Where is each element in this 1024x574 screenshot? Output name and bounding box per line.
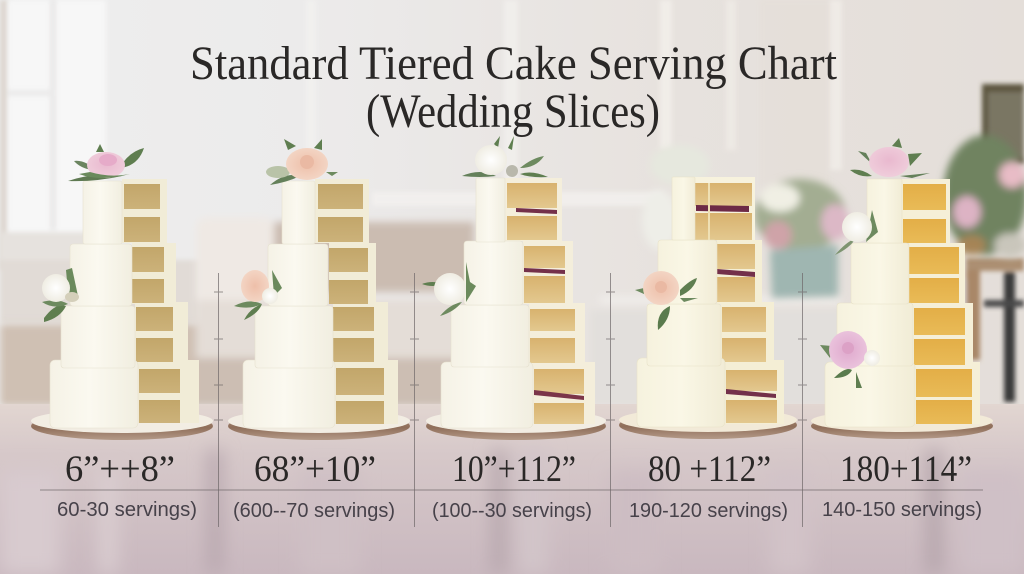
cake 2: [228, 139, 410, 440]
cake 5: [811, 138, 993, 439]
servings labels: 190-120 servings): [629, 500, 788, 522]
size labels: 68”+10”: [254, 449, 376, 490]
frosted tiers: [441, 178, 533, 428]
side flower: white: [835, 210, 878, 255]
tier 1 slice: [122, 179, 167, 243]
title: (Wedding Slices): [366, 85, 660, 138]
top flower: peach rose: [266, 139, 338, 185]
frosted tiers: [243, 181, 335, 428]
title: Standard Tiered Cake Serving Chart: [190, 37, 838, 90]
tier 3 slice: [913, 303, 973, 366]
title: [190, 37, 838, 138]
frosted tiers: [825, 179, 915, 427]
background bouquets: [642, 135, 1024, 298]
frosted tiers: [50, 181, 138, 428]
horizontal rule: [40, 490, 983, 491]
cake board: [619, 408, 797, 439]
tier 1 slice: [672, 177, 755, 240]
tier 3 slice: [721, 302, 774, 362]
drape folds: [0, 450, 1024, 574]
table cloth: [0, 404, 1024, 574]
tier 4 slice: [335, 360, 398, 424]
tier 2 slice: [523, 241, 573, 304]
tier 3 slice: [529, 303, 585, 365]
size labels: 6”++8”: [65, 449, 175, 490]
tier 2 slice: [717, 240, 762, 304]
tier 3 slice: [135, 302, 188, 363]
size labels: [65, 449, 972, 490]
side flower: white: [422, 262, 476, 316]
tier 2 slice: [909, 243, 965, 304]
tier 4 slice: [725, 360, 784, 424]
servings labels: (100--30 servings): [432, 500, 592, 522]
cake 1: [31, 144, 213, 440]
side flower: pale peach: [234, 270, 282, 320]
tier 4 slice: [915, 362, 980, 424]
frosted tiers: [637, 177, 725, 427]
window: [0, 0, 200, 322]
side flower: lilac rose: [820, 331, 880, 388]
size labels: 80 +112”: [648, 449, 771, 490]
picture frame and side table: [880, 84, 1024, 405]
tier 4 slice: [533, 362, 595, 424]
wall panel mouldings: [0, 0, 842, 270]
cake board: [811, 410, 993, 439]
servings labels: [57, 499, 982, 522]
tier 2 slice: [132, 243, 176, 304]
cake 3: [422, 136, 606, 440]
tier 1 slice: [505, 178, 562, 241]
size labels: 10”+112”: [452, 449, 576, 490]
top flower: white rose: [462, 136, 548, 177]
tier 4 slice: [138, 360, 199, 423]
cake board: [228, 409, 410, 440]
top flower: pink: [850, 138, 930, 178]
cake board: [31, 409, 213, 440]
tier 1 slice: [315, 179, 369, 243]
servings labels: 140-150 servings): [822, 499, 982, 521]
vertical dividers with ticks: [214, 273, 807, 527]
top flower: pink peony: [68, 144, 144, 181]
side flower: white: [42, 268, 79, 322]
size labels: 180+114”: [840, 449, 972, 490]
side flower: peach rose: [635, 271, 698, 330]
cake board: [426, 409, 606, 440]
tier 2 slice: [329, 243, 376, 304]
servings labels: 60-30 servings): [57, 499, 197, 521]
sofa: [0, 218, 476, 406]
tier 1 slice: [902, 179, 950, 243]
cake 4: [619, 177, 797, 439]
tier 3 slice: [333, 302, 388, 363]
servings labels: (600--70 servings): [233, 500, 395, 522]
sideboard: [590, 296, 880, 405]
